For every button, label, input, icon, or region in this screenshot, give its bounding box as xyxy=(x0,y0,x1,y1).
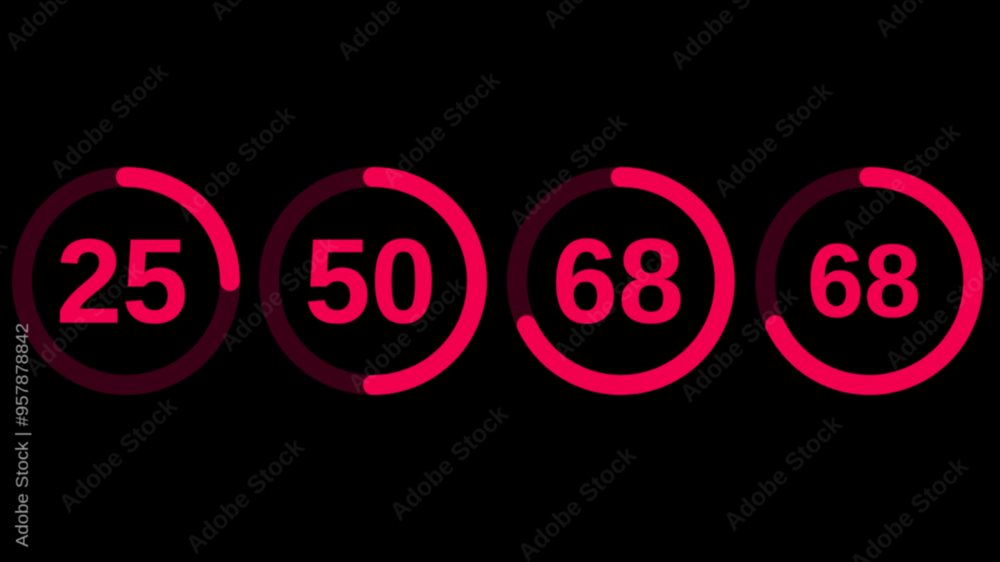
watermark pattern: Adobe Stock xyxy=(547,240,677,366)
watermark pattern: Adobe Stock xyxy=(503,108,633,234)
gauge 50 number: 50 xyxy=(304,214,436,348)
watermark pattern: Adobe Stock xyxy=(214,231,344,357)
watermark pattern: Adobe Stock xyxy=(384,400,514,526)
gauge 68 number: 68 xyxy=(552,214,684,348)
gauge 68 progress arc xyxy=(527,177,725,385)
watermark pattern: Adobe Stock xyxy=(171,101,301,227)
watermark pattern: Adobe Stock xyxy=(836,118,966,244)
gauge: 68 percent, smaller number xyxy=(765,177,973,385)
watermark pattern: Adobe Stock xyxy=(708,77,838,203)
watermark pattern: Adobe Stock xyxy=(718,410,848,536)
second gauge 68 track ring xyxy=(765,177,973,385)
gauge 25 number: 25 xyxy=(56,214,188,348)
vertical stock id label: Adobe Stock | #957878842 xyxy=(12,323,32,547)
watermark pattern: Adobe Stock xyxy=(53,392,183,518)
second gauge 68 progress arc xyxy=(775,177,973,385)
gauge: 25 percent xyxy=(22,177,230,385)
gauge: 50 percent xyxy=(269,177,477,385)
gauge 50 progress arc xyxy=(373,177,477,385)
gauge 50 track ring xyxy=(269,177,477,385)
watermark pattern: Adobe Stock xyxy=(674,282,804,408)
watermark pattern: Adobe Stock xyxy=(376,66,506,192)
watermark pattern: Adobe Stock xyxy=(180,433,310,559)
gauge 25 track ring xyxy=(22,177,230,385)
gauge 25 progress arc xyxy=(126,177,230,281)
second gauge 68 number: 68 xyxy=(807,224,921,340)
watermark pattern: Adobe Stock xyxy=(342,272,472,398)
gauge: 68 percent, large number xyxy=(517,177,725,385)
watermark pattern: Adobe Stock xyxy=(44,58,174,184)
watermark pattern: Adobe Stock xyxy=(19,256,149,382)
gauge 68 track ring xyxy=(517,177,725,385)
